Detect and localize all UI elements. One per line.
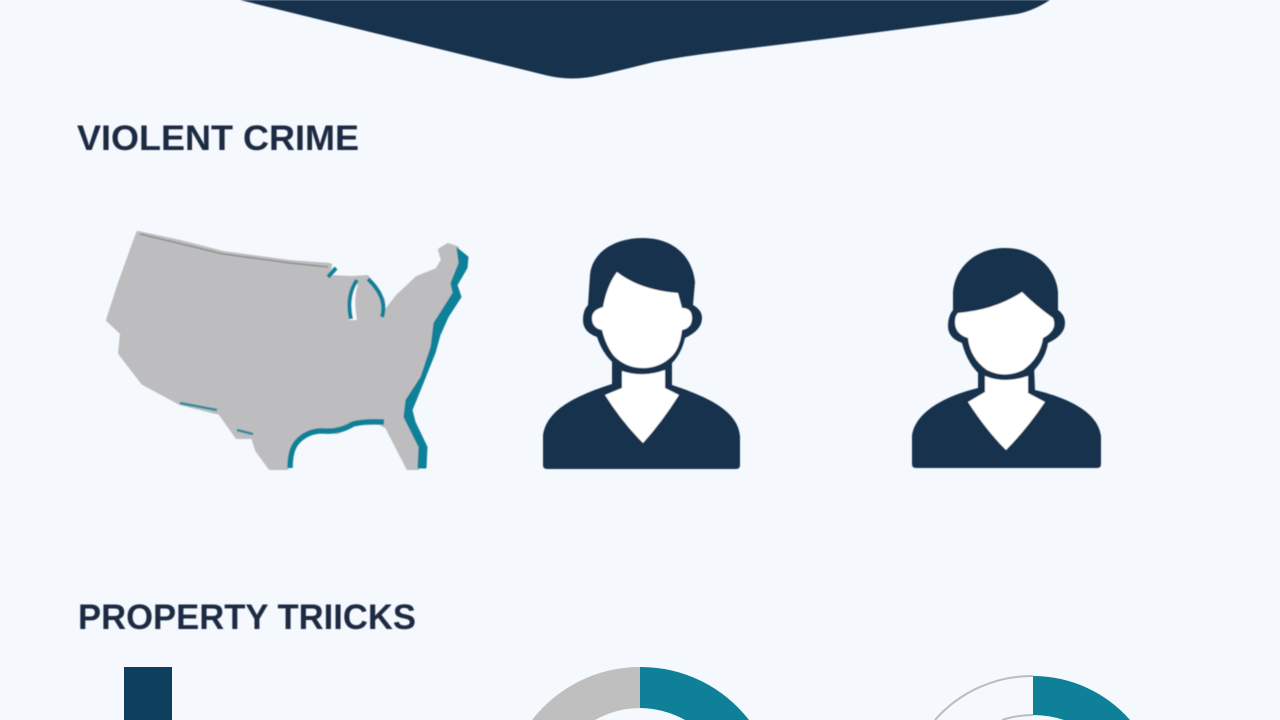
thick ring grey segment: [532, 667, 640, 720]
donut chart: thin outline ring: [935, 676, 1130, 720]
heading: property trucks: PROPERTY TRIICKS: [78, 598, 416, 637]
map of the United States: [108, 233, 468, 468]
icon: person with fringe hair: [912, 248, 1101, 468]
person two face: [955, 292, 1054, 374]
header banner: [240, 0, 1050, 78]
thin ring teal segment: [1033, 676, 1130, 720]
map land shape: [108, 233, 458, 468]
person one face: [592, 272, 692, 368]
map northern border shadow: [140, 234, 328, 267]
map gulf coast teal edge: [290, 422, 384, 468]
bar chart: single bar: [124, 667, 172, 720]
person two head and hair: [948, 248, 1065, 382]
person one head and hair: [583, 238, 702, 374]
thick ring teal segment: [640, 667, 749, 720]
person two body: [912, 365, 1101, 468]
donut chart: thick ring: [532, 667, 749, 720]
person two neck and collar: [968, 376, 1045, 450]
map great lakes teal edges: [328, 268, 383, 319]
map southwest teal edge: [180, 403, 253, 434]
map east coast teal edge: [404, 248, 468, 468]
person one neck and collar: [605, 370, 679, 443]
thin ring grey outlines: [935, 676, 1033, 720]
heading: violent crime: VIOLENT CRIME: [77, 119, 359, 158]
person one body: [543, 360, 740, 469]
map lake Michigan notch: [348, 283, 358, 320]
icon: person with side-swept hair: [543, 238, 740, 469]
